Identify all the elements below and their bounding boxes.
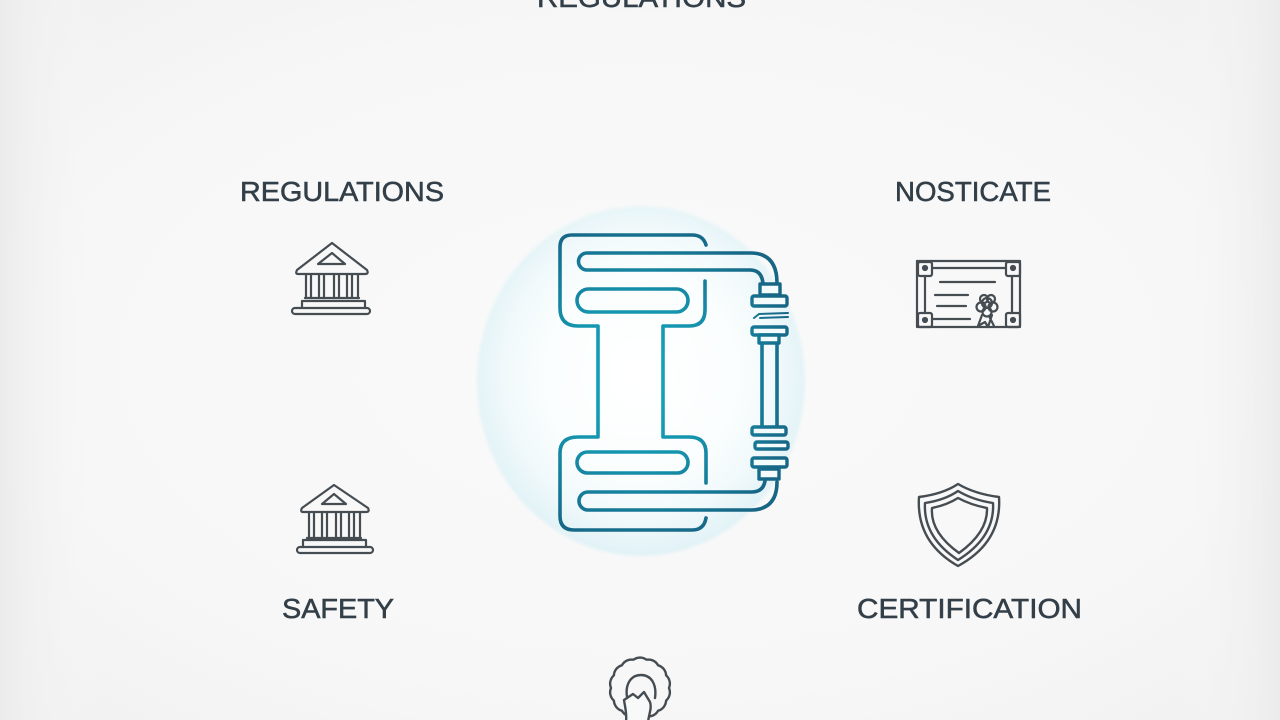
bottom coupling xyxy=(752,427,788,479)
label: certification: CERTIFICATION xyxy=(857,593,1082,624)
I-shaped outline xyxy=(560,235,706,530)
top coupling xyxy=(752,284,788,343)
icon: shield xyxy=(919,484,999,566)
icon: government building xyxy=(292,243,370,314)
vertical pipe xyxy=(762,343,777,427)
bottom pipe run xyxy=(579,481,777,510)
inner slots xyxy=(577,289,688,473)
icon: certificate xyxy=(917,261,1020,327)
icon: hand on gear xyxy=(610,658,670,720)
inner arch xyxy=(627,675,655,698)
label: regulations: REGULATIONS xyxy=(240,176,444,207)
rosette xyxy=(976,295,998,327)
central emblem: pipe on glowing disc xyxy=(477,206,805,556)
glowing disc xyxy=(477,206,805,556)
top pipe run xyxy=(578,253,777,284)
gear outline xyxy=(610,658,670,718)
label: nosticate: NOSTICATE xyxy=(895,176,1051,207)
icon: government building, lower xyxy=(297,485,373,553)
hand xyxy=(624,692,651,720)
label: safety: SAFETY xyxy=(282,593,394,624)
